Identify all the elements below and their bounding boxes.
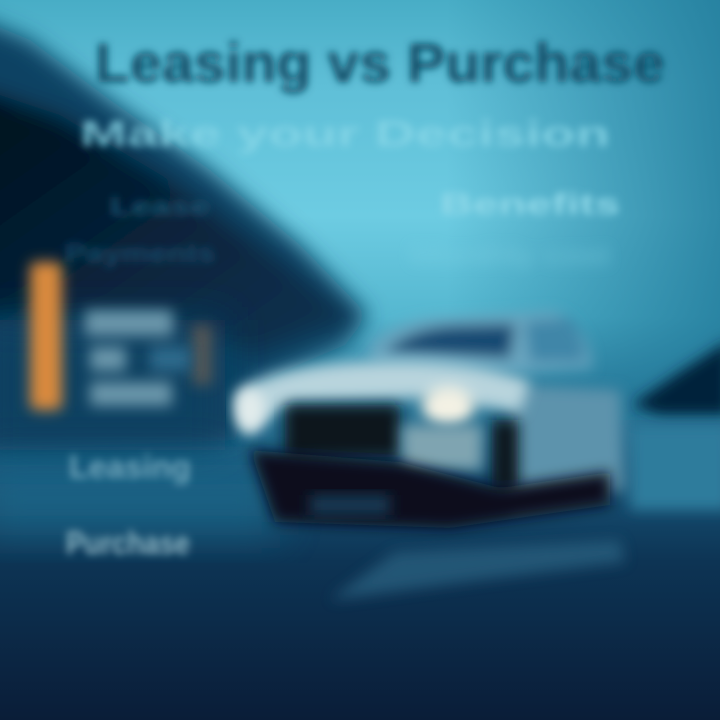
road reflection [330,540,625,600]
car roof and windshield [370,312,592,372]
car bumper and underbody [250,450,610,528]
right text line two: Monthly cost [410,240,611,270]
right building wall [630,425,720,510]
left lower label one: Leasing [69,449,191,485]
right text line one: Benefits [440,188,620,221]
title: Leasing vs Purchase [95,31,665,94]
left lower label two: Purchase [66,525,190,561]
dark building roof on left [0,15,368,450]
car grille [285,405,518,490]
left panel heading: Lease [110,191,210,221]
right dark roof [632,340,720,415]
car body side [510,385,625,510]
lit window panes [85,310,190,406]
building facade on left [0,320,225,450]
glowing orange window [30,262,212,410]
ground reflection band [0,465,280,535]
car [235,312,625,528]
left panel subheading: Payments [65,238,215,268]
car hood [235,361,530,435]
bumper centre [402,425,482,470]
subtitle: Make your Decision [80,113,610,154]
lower grille shade [310,495,390,515]
left headlight [235,388,265,432]
car headlight [422,386,474,426]
